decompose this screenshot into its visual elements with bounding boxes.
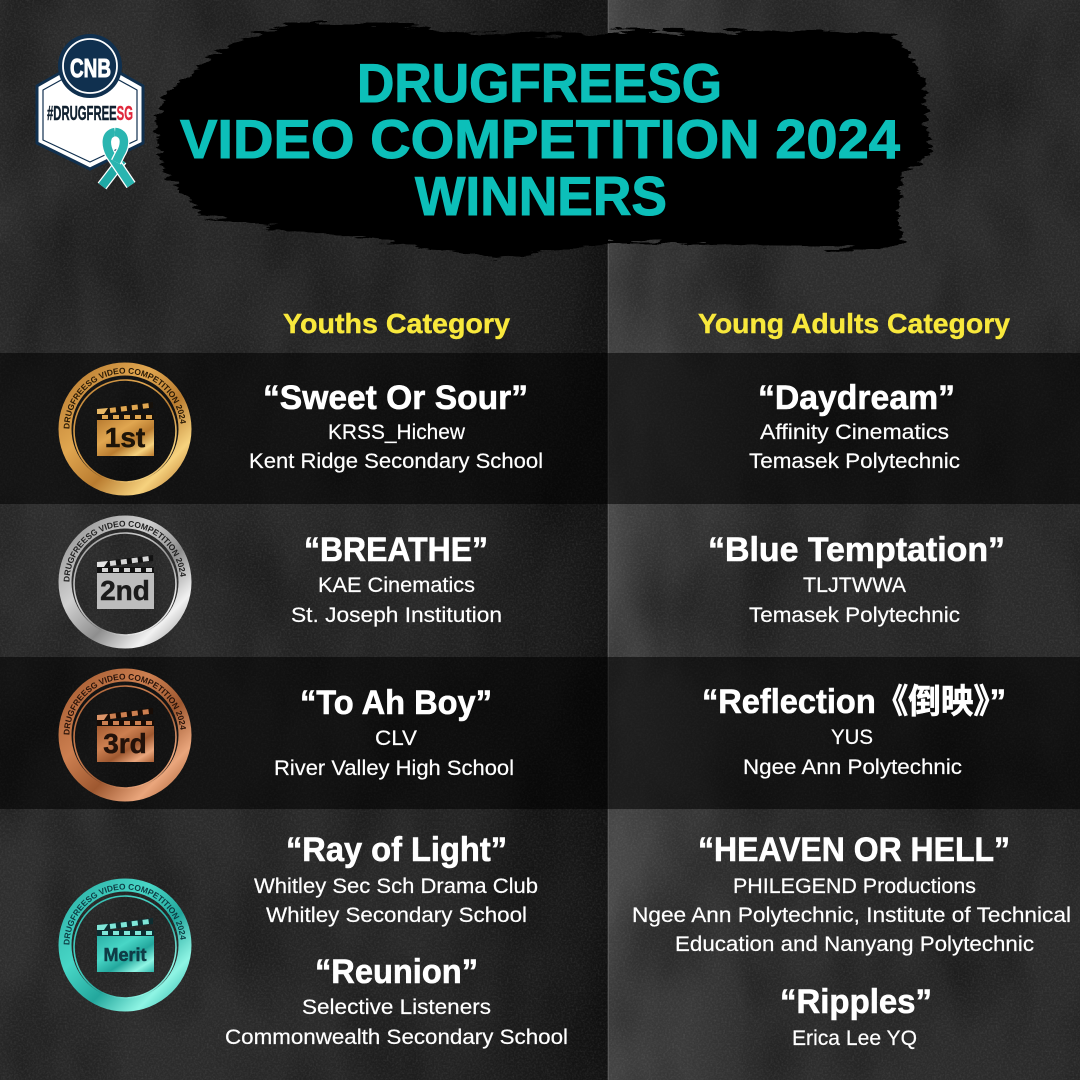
- badge: Merit: Merit: [103, 945, 147, 965]
- logo circle: CNB: [70, 53, 111, 83]
- entry: Blue Temptation: “Blue Temptation”: [708, 531, 1005, 569]
- badge: Merit: [58, 878, 192, 1012]
- entry: Ripples: Erica Lee YQ: [792, 1027, 917, 1050]
- entry: HEAVEN OR HELL: Ngee Ann Polytechnic, Institute of Technical: [632, 904, 1071, 927]
- entry: Reflection: Ngee Ann Polytechnic: [743, 756, 962, 779]
- badge: 1st: 1st: [105, 422, 145, 453]
- logo hashtag: #DRUGFREESG: [47, 103, 133, 125]
- icon: teal ribbon: [102, 132, 131, 186]
- entry: Reflection: YUS: [831, 726, 873, 749]
- entry: Ripples: “Ripples”: [780, 983, 932, 1021]
- entry: HEAVEN OR HELL: PHILEGEND Productions: [733, 875, 976, 898]
- entry: Ray of Light: [254, 831, 538, 927]
- entry: Reunion: “Reunion”: [315, 953, 478, 991]
- entry: Reunion: Selective Listeners: [302, 996, 491, 1019]
- band: third place row: [0, 657, 1080, 809]
- entry: Sweet Or Sour: “Sweet Or Sour”: [263, 379, 528, 417]
- entry: HEAVEN OR HELL: “HEAVEN OR HELL”: [698, 831, 1010, 869]
- entry: BREATHE: [291, 531, 502, 627]
- badge: 2nd: DRUGFREESG VIDEO COMPETITION 2024: [64, 520, 186, 582]
- entry: Blue Temptation: Temasek Polytechnic: [749, 604, 960, 627]
- badge: 1st: [58, 362, 192, 496]
- badge: 3rd: [58, 668, 192, 802]
- title: VIDEO COMPETITION 2024: [180, 108, 900, 170]
- entry: Reflection: [702, 683, 1006, 779]
- band: first place row: [0, 353, 1080, 504]
- entry: Blue Temptation: [708, 531, 1005, 627]
- entry: Blue Temptation: TLJTWWA: [803, 574, 906, 597]
- entry: Reunion: [225, 953, 568, 1049]
- entry: Daydream: Affinity Cinematics: [760, 421, 949, 444]
- entry: Ripples: [780, 983, 932, 1050]
- entry: BREATHE: “BREATHE”: [304, 531, 488, 569]
- entry: HEAVEN OR HELL: Education and Nanyang Polytechnic: [675, 933, 1034, 956]
- entry: To Ah Boy: CLV: [375, 727, 417, 750]
- title: [180, 52, 900, 227]
- badge: 2nd: 2nd: [100, 575, 150, 606]
- badge: 3rd: 3rd: [103, 728, 147, 759]
- title: DRUGFREESG: [357, 52, 722, 114]
- badge: 1st: DRUGFREESG VIDEO COMPETITION 2024: [64, 368, 186, 429]
- badge: 2nd: [58, 516, 192, 648]
- entry: Sweet Or Sour: KRSS_Hichew: [328, 421, 466, 444]
- entry: Reunion: Commonwealth Secondary School: [225, 1026, 568, 1049]
- entry: Reflection: “Reflection《倒映》”: [702, 683, 1006, 721]
- entry: Daydream: “Daydream”: [758, 379, 955, 417]
- entry: Ray of Light: Whitley Secondary School: [266, 904, 527, 927]
- badge: 3rd: DRUGFREESG VIDEO COMPETITION 2024: [64, 674, 186, 735]
- category heading: Young Adults: Young Adults Category: [698, 308, 1010, 339]
- entry: To Ah Boy: [274, 684, 514, 780]
- badge: Merit: DRUGFREESG VIDEO COMPETITION 2024: [64, 884, 186, 945]
- entry: Sweet Or Sour: Kent Ridge Secondary School: [249, 450, 543, 473]
- entry: Ray of Light: Whitley Sec Sch Drama Club: [254, 875, 538, 898]
- entry: To Ah Boy: “To Ah Boy”: [300, 684, 492, 722]
- category heading: Youths: Youths Category: [283, 308, 510, 339]
- entry: Sweet Or Sour: [249, 379, 543, 473]
- logo: CNB #DrugFreeSG badge: [37, 34, 143, 186]
- entry: Ray of Light: “Ray of Light”: [286, 831, 507, 869]
- logo circle: [58, 34, 122, 98]
- entry: Daydream: [749, 379, 960, 473]
- logo shield: [37, 56, 143, 169]
- entry: BREATHE: KAE Cinematics: [318, 574, 475, 597]
- entry: BREATHE: St. Joseph Institution: [291, 604, 502, 627]
- black brush stroke behind title: [155, 24, 932, 257]
- entry: To Ah Boy: River Valley High School: [274, 757, 514, 780]
- entry: HEAVEN OR HELL: [632, 831, 1071, 956]
- entry: Daydream: Temasek Polytechnic: [749, 450, 960, 473]
- title: WINNERS: [415, 165, 667, 227]
